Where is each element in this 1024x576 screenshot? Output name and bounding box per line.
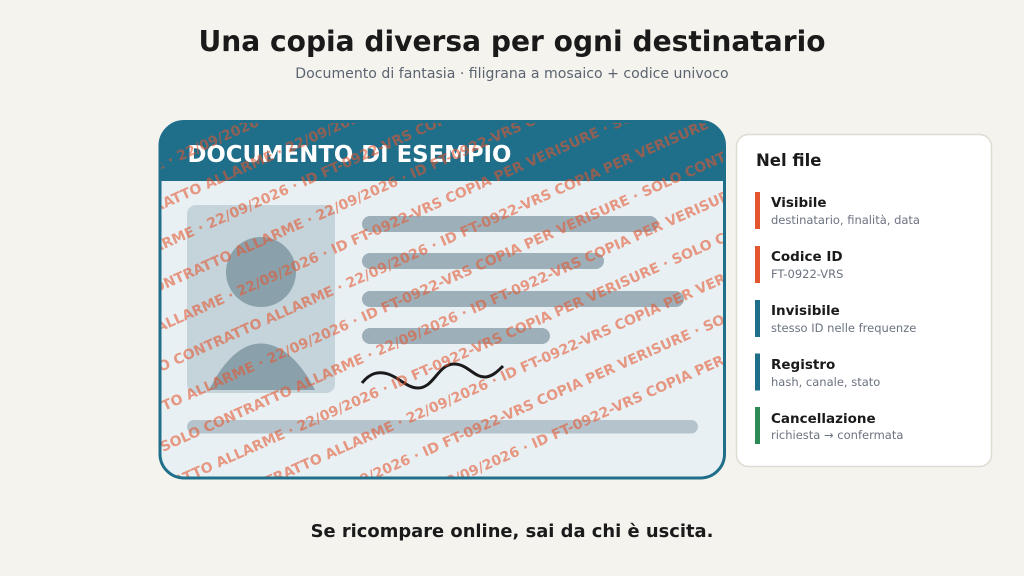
item: cancellazione: Cancellazione [771, 411, 876, 427]
watermark rows: SOLO CONTRATTO ALLARME · 22/09/2026 · ID FT-0922-VRS COPIA PER VERISURE · SOLO CONTRATTO [158, 120, 885, 456]
watermark rows: ALLARME · 22/09/2026 · ID FT-0922-VRS COPIA PER VERISURE · SOLO CONTRATTO [245, 263, 838, 539]
watermark rows: SOLO CONTRATTO ALLARME · 22/09/2026 · ID FT-0922-VRS COPIA PER VERISURE · SOLO [188, 228, 824, 523]
item: invisibile: stesso ID nelle frequenze [771, 321, 916, 335]
item: codice id: FT-0922-VRS [771, 267, 843, 281]
subtitle: Documento di fantasia · filigrana a mosaico + codice univoco [295, 66, 729, 82]
item: cancellazione [755, 407, 903, 444]
panel: nel file [736, 134, 992, 466]
bottom line placeholder [187, 420, 698, 434]
closing statement: Se ricompare online, sai da chi è uscita. [311, 521, 713, 542]
item: codice id: Codice ID [771, 249, 843, 265]
panel heading: Nel file [756, 151, 821, 170]
title: Una copia diversa per ogni destinatario [198, 25, 826, 58]
item: visibile [755, 192, 920, 229]
watermark rows: SOLO CONTRATTO ALLARME · 22/09/2026 · ID FT-0922-VRS COPIA PER VERISURE · SOLO CONTRATTO ALLARME [19, 29, 818, 396]
item: visibile: destinatario, finalità, data [771, 213, 920, 227]
watermark rows: SOLO CONTRATTO ALLARME · 22/09/2026 · ID FT-0922-VRS COPIA PER VERISURE · SOLO CONTRATTO [79, 196, 806, 531]
item: invisibile: Invisibile [771, 303, 840, 319]
signature [362, 364, 503, 388]
card heading: DOCUMENTO DI ESEMPIO [188, 142, 511, 168]
item: cancellazione: richiesta → confermata [771, 428, 903, 442]
item: visibile: Visibile [771, 195, 827, 211]
item: invisibile [755, 300, 916, 337]
watermark rows: SOLO CONTRATTO ALLARME · 22/09/2026 · ID FT-0922-VRS COPIA PER VERISURE · SOLO CONTRATTO ALLARME [49, 96, 848, 464]
text line placeholders [362, 216, 684, 344]
item: registro: Registro [771, 357, 835, 373]
card header band [159, 120, 726, 181]
watermark rows: SOLO CONTRATTO ALLARME · 22/09/2026 · ID FT-0922-VRS COPIA PER VERISURE · SOLO CONTRATTO [128, 53, 855, 388]
watermark rows: 22/09/2026 · ID FT-0922-VRS COPIA PER VERISURE · SOLO [435, 296, 855, 494]
item: registro [755, 354, 880, 390]
item: codice id [755, 246, 843, 283]
item: registro: hash, canale, stato [771, 375, 880, 389]
panel: document card [158, 120, 726, 480]
photo placeholder [187, 205, 335, 393]
